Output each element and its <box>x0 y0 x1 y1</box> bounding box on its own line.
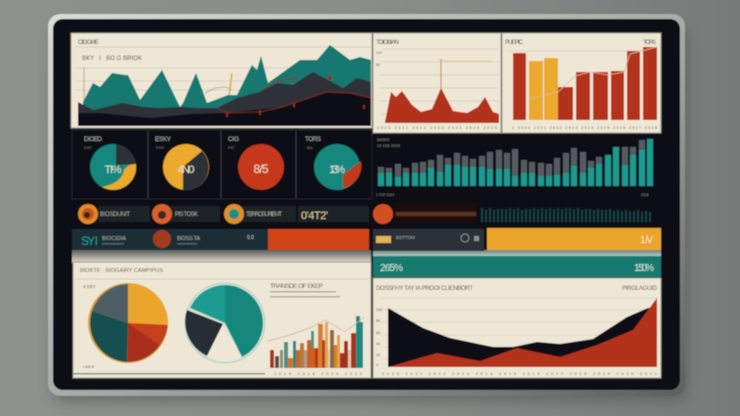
banner value right: 1 50% <box>634 263 654 274</box>
y axis labels: 0 <box>376 363 378 367</box>
kpi sublabel <box>102 243 124 244</box>
red area <box>385 88 499 123</box>
kpi label: BOTTOM <box>396 235 415 240</box>
kpi dots: 0.0 <box>247 235 254 241</box>
gauge 1: DAY <box>84 145 92 150</box>
kpi icon <box>153 230 171 248</box>
gauge 3 <box>228 136 284 190</box>
y axis labels <box>376 308 382 367</box>
gauge 3: 8/5 <box>254 162 269 176</box>
kpi bar right <box>373 228 661 251</box>
kpi sublabel 2 <box>177 243 197 244</box>
banner: teal <box>373 256 661 277</box>
status item 2 <box>152 204 220 224</box>
panel title: DIODO <box>377 138 389 142</box>
red area <box>388 298 657 367</box>
panel title: PUEPIC <box>505 40 524 46</box>
small footer label: LAB B <box>83 364 95 369</box>
panel: gauge row <box>72 130 372 199</box>
gauge 2: ESKY <box>155 136 172 143</box>
bars <box>513 47 657 120</box>
status item 3 <box>224 204 296 224</box>
x axis labels: 1 2020 2021 2022 2023 2024 2025 2026 2027 2028 <box>512 126 657 130</box>
chart footer left: 1 TOP 2024 <box>376 193 394 197</box>
gauge 4: 13% <box>329 164 345 176</box>
status item 4 <box>298 206 369 222</box>
small yellow chip <box>376 236 391 243</box>
panel subtitle: 10 020 2024 <box>377 144 400 148</box>
red noise strip <box>395 203 477 223</box>
gauge 1: DIOED <box>84 136 102 143</box>
small label: 4 EBY <box>83 284 96 289</box>
x axis labels: 2020 2021 2022 2023 2024 2025 2026 <box>377 126 497 130</box>
dashboard frame <box>48 14 685 396</box>
gauge 2: 4N0 <box>178 164 194 176</box>
gauge 3: PIC <box>228 145 235 150</box>
kpi bar left <box>72 229 369 250</box>
y axis labels: 20 <box>376 353 380 357</box>
light band under left kpi bar <box>72 250 371 263</box>
red trend line <box>217 78 371 113</box>
y axis labels: 60 <box>376 331 380 335</box>
pie chart 2 <box>185 283 265 363</box>
light band above teal banner <box>373 250 661 257</box>
gauge 2: POC <box>156 145 165 150</box>
gauge 4: Bis <box>307 145 313 150</box>
kpi value: 1 /V <box>640 235 653 246</box>
chart footer right: 2028 <box>641 193 649 197</box>
kpi label: BIOCIDIA <box>102 236 126 242</box>
kpi small square <box>474 236 479 241</box>
kpi value: SY I <box>81 234 98 248</box>
panel right title: PIRGLAGUID <box>622 286 658 292</box>
panel: red area chart <box>373 33 501 133</box>
mini chart labels: 2016 2018 2020 2022 <box>274 371 363 376</box>
panel: pie charts <box>73 262 371 378</box>
gauge 3: CIG <box>228 136 239 143</box>
panel title: TDIOBIAN <box>376 40 399 46</box>
status item 1: BIOSDUNIT <box>100 212 130 218</box>
status item 1 <box>78 204 150 224</box>
panel title: DOSSFHY TAY IA PROOI CLIENBORT <box>376 286 473 292</box>
thin trend line <box>205 87 232 93</box>
red markers <box>226 76 365 117</box>
y axis labels: 100 <box>376 51 382 55</box>
gauge 4 <box>305 136 361 190</box>
status item 3: TERROSURIEMT <box>246 212 282 218</box>
marker line <box>438 60 491 61</box>
panel: main area chart <box>71 33 372 128</box>
side text <box>270 291 340 298</box>
y axis labels: 40 <box>376 342 380 346</box>
teal columns <box>378 139 653 186</box>
y axis labels: 100 <box>376 308 382 312</box>
panel subtitle: BKY I BO G BRIOK <box>82 56 142 62</box>
status row <box>72 201 662 227</box>
dark grey area <box>78 72 371 126</box>
pie chart 1 <box>88 283 168 363</box>
x axis labels: 2010 2011 2012 2013 2014 2015 2016 2017 2018 2019 2020 2021 <box>382 371 658 376</box>
gauge 2 <box>155 136 209 190</box>
gauge 1: TI% <box>104 164 122 176</box>
gauge 4: TORS <box>305 136 322 143</box>
red noise strip text <box>396 212 476 216</box>
gauge 1 <box>84 136 136 190</box>
panel: area comparison chart <box>373 278 661 378</box>
status icon right <box>373 204 393 224</box>
black area <box>78 92 371 126</box>
bottom rule <box>73 373 265 374</box>
panel right title: TORS <box>643 40 656 46</box>
panel title: CIDGME <box>78 40 99 46</box>
y axis labels lower: 80 <box>376 63 380 67</box>
yellow marker <box>229 73 232 96</box>
grey columns <box>378 139 653 186</box>
kpi label 2: BIOSS TA <box>177 236 200 242</box>
panel: dark column chart <box>374 135 660 199</box>
teal area <box>83 45 371 126</box>
black area <box>388 308 657 367</box>
teal noise strip <box>482 208 650 222</box>
panel title: BIOKTE · BIOGAIRY CAMPIPUS <box>80 268 163 274</box>
status item 4: 0'4T2' <box>301 210 328 222</box>
device shadow <box>52 24 688 402</box>
status item 2: PIS TOSK <box>175 212 198 218</box>
trend line <box>529 47 657 99</box>
mini bar chart <box>270 316 363 368</box>
panel: bar chart <box>502 33 661 133</box>
banner value left: 265% <box>380 263 403 274</box>
side heading: TRANSDE OF EKEP <box>270 283 323 290</box>
mini trend line <box>268 317 364 341</box>
kpi icons <box>461 234 469 242</box>
y axis labels: 80 <box>376 319 380 323</box>
marker stem <box>440 59 442 88</box>
